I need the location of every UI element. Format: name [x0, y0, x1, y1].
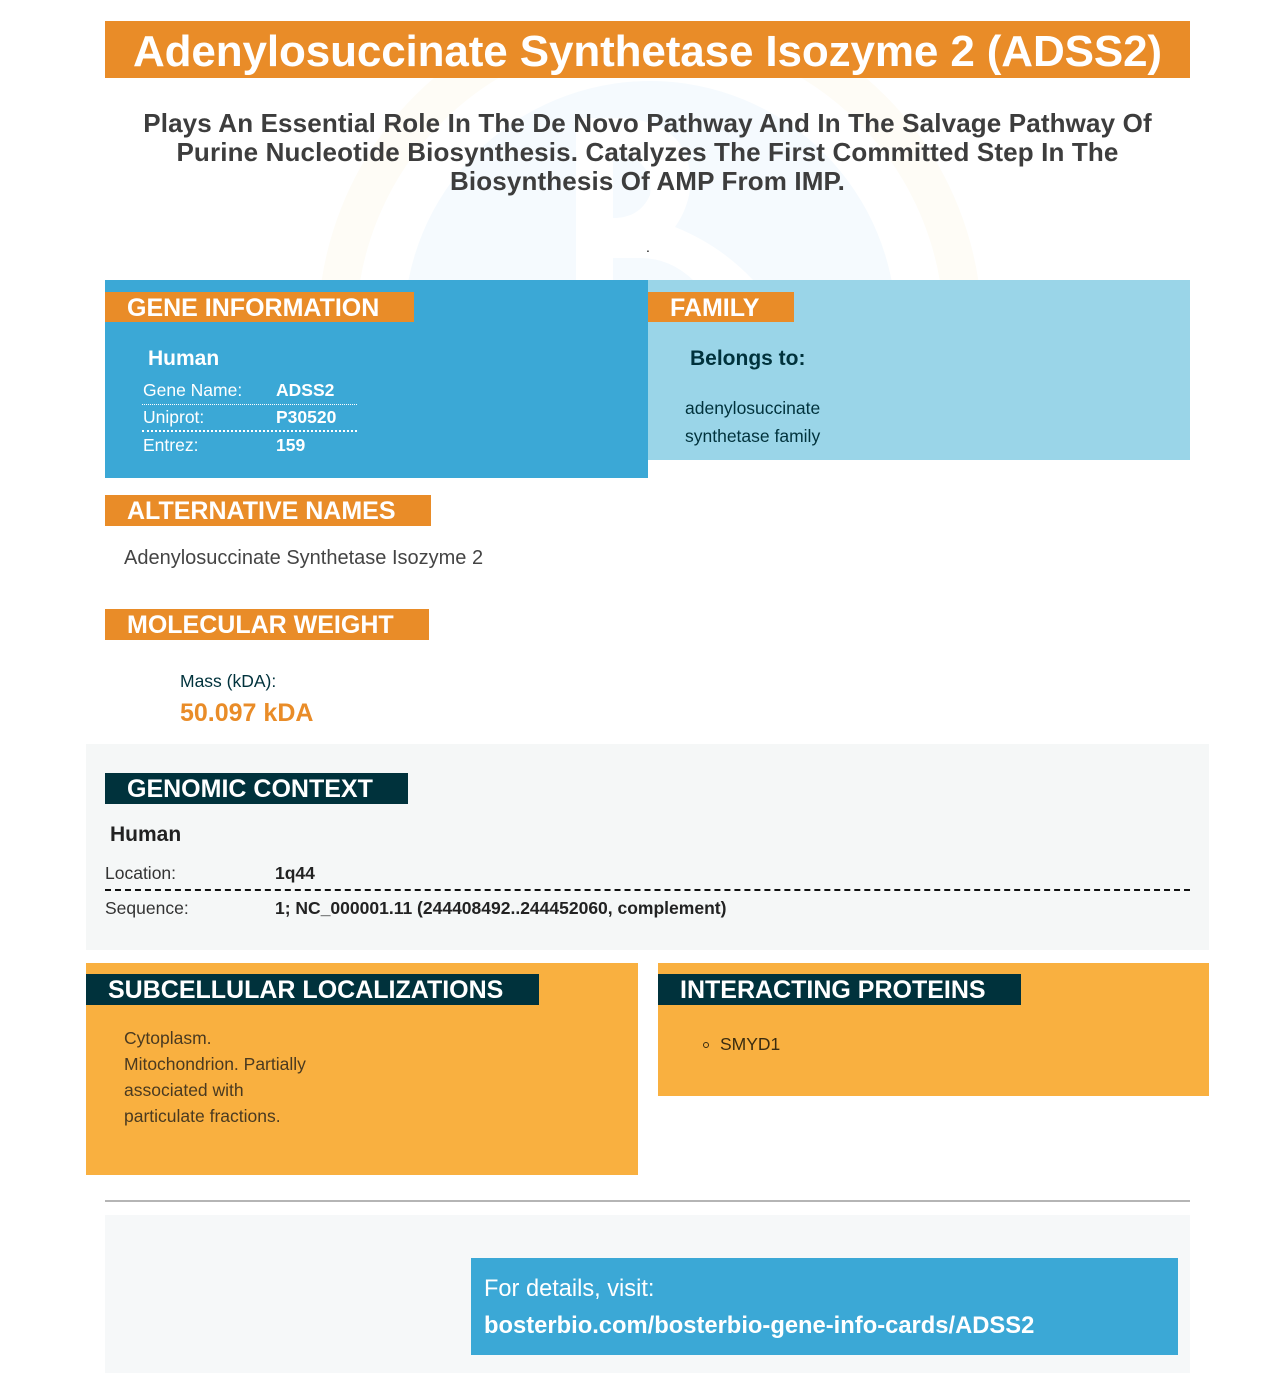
watermark logo [322, 78, 978, 280]
localization text [124, 1028, 306, 1126]
panel: interacting proteins [658, 963, 1209, 1096]
callout: details link [471, 1258, 1178, 1355]
heading: interacting proteins: INTERACTING PROTEINS [680, 976, 986, 1004]
heading: gene information: GENE INFORMATION [127, 294, 379, 322]
localization text: associated with [124, 1080, 244, 1100]
row: sequence: Sequence: [105, 898, 189, 918]
panel: gene information [105, 280, 648, 478]
heading: genomic context: GENOMIC CONTEXT [127, 775, 373, 803]
family text: adenylosuccinate [685, 398, 820, 418]
row: entrez: Entrez: [143, 435, 198, 455]
dot: . [646, 239, 650, 255]
row: location: 1q44 [275, 863, 315, 883]
title banner: Adenylosuccinate Synthetase Isozyme 2 (ADSS2) [133, 27, 1162, 76]
heading: alternative names: ALTERNATIVE NAMES [127, 497, 396, 525]
row: gene name [142, 377, 357, 405]
row: uniprot: Uniprot: [143, 407, 204, 427]
row: entrez [143, 435, 305, 455]
callout label: For details, visit: [484, 1276, 654, 1302]
subtitle [143, 108, 1152, 196]
species label: Human [148, 347, 219, 370]
belongs to label: Belongs to: [690, 347, 806, 370]
mass label: Mass (kDA): [180, 671, 276, 691]
subtitle: Purine Nucleotide Biosynthesis. Catalyzes The First Committed Step In The [176, 137, 1119, 167]
heading: molecular weight: MOLECULAR WEIGHT [127, 611, 394, 639]
divider [105, 1200, 1190, 1202]
mass value: 50.097 kDA [180, 699, 313, 727]
callout url: bosterbio.com/bosterbio-gene-info-cards/ADSS2 [484, 1312, 1034, 1339]
row: location: Location: [105, 863, 176, 883]
row: gene name: ADSS2 [276, 380, 334, 400]
subtitle: Biosynthesis Of AMP From IMP. [450, 166, 845, 196]
localization text: particulate fractions. [124, 1106, 281, 1126]
protein name: SMYD1 [720, 1034, 780, 1054]
family text [685, 398, 820, 446]
family text: synthetase family [685, 426, 820, 446]
alternative names text: Adenylosuccinate Synthetase Isozyme 2 [124, 547, 483, 569]
row: gene name: Gene Name: [143, 380, 242, 400]
row: entrez: 159 [276, 435, 305, 455]
species label: Human [110, 823, 181, 846]
localization text: Mitochondrion. Partially [124, 1054, 306, 1074]
panel: family [648, 280, 1190, 460]
subtitle: Plays An Essential Role In The De Novo Pathway And In The Salvage Pathway Of [143, 108, 1152, 138]
localization text: Cytoplasm. [124, 1028, 212, 1048]
panel: subcellular localizations [86, 963, 638, 1175]
heading: family [648, 292, 794, 322]
heading: family: FAMILY [670, 294, 759, 322]
heading: subcellular localizations: SUBCELLULAR LOCALIZATIONS [108, 976, 503, 1004]
row: sequence: 1; NC_000001.11 (244408492..244452060, complement) [275, 898, 726, 918]
row: location [105, 860, 1190, 891]
panel: footer [105, 1215, 1190, 1373]
bullet marker [703, 1042, 709, 1048]
row: uniprot: P30520 [276, 407, 336, 427]
gene info table [142, 380, 357, 455]
panel: genomic context [86, 744, 1209, 950]
row: uniprot [142, 404, 357, 432]
